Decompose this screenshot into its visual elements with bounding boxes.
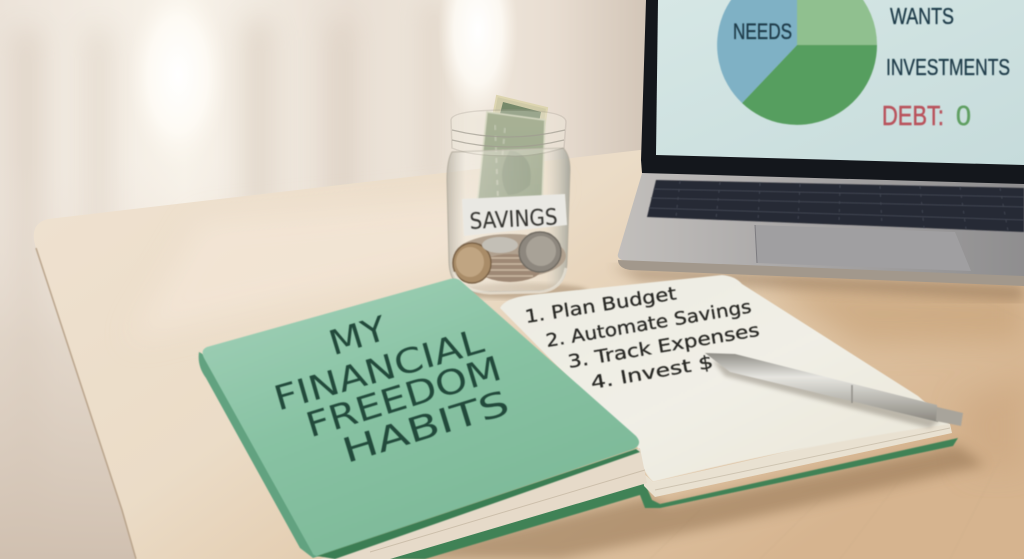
back cover green edge [378, 438, 958, 559]
cover title: HABITS [338, 383, 514, 472]
laptop lid bezel [641, 0, 1024, 184]
jar body [447, 148, 570, 292]
savings label [462, 194, 567, 236]
laptop front lip [618, 260, 1024, 286]
notebook shadow [380, 445, 985, 559]
keyboard [647, 180, 1024, 232]
right page [500, 275, 950, 482]
debt figure: DEBT: [882, 100, 944, 131]
pie chart [717, 0, 877, 125]
pen shadow [712, 360, 940, 428]
cover title: FINANCIAL [270, 321, 488, 419]
screen labels: NEEDS [733, 19, 792, 44]
front cover [203, 278, 639, 556]
coins [453, 232, 566, 283]
pen [705, 353, 963, 426]
book pages under front cover [320, 448, 647, 559]
laptop [612, 0, 1024, 300]
desk front edge shadow [36, 248, 136, 559]
light and shade on desk [130, 185, 1024, 470]
habit list [523, 283, 761, 394]
savings label text: SAVINGS [469, 205, 558, 235]
desk [34, 150, 1024, 559]
cover title: FREEDOM [301, 349, 506, 446]
habit list: 1. Plan Budget [523, 283, 678, 328]
habit list: 3. Track Expenses [566, 320, 761, 373]
trackpad [755, 225, 971, 271]
wood grain [650, 300, 1024, 559]
screen labels [733, 3, 1010, 80]
front cover spine side [199, 352, 319, 558]
laptop screen [656, 0, 1024, 165]
jar shadow [452, 283, 588, 299]
debt figure: 0 [956, 100, 971, 131]
habit list: 2. Automate Savings [544, 297, 753, 352]
cover bottom green edge [317, 449, 640, 559]
money bill back [492, 96, 547, 130]
habit list: 4. Invest $ [589, 352, 715, 394]
money bill front [477, 112, 545, 205]
savings jar [447, 96, 588, 299]
open notebook [199, 275, 985, 559]
cover title: MY [324, 309, 392, 364]
screen labels: WANTS [890, 3, 954, 29]
page block edge [640, 420, 952, 497]
jar base highlight [454, 268, 566, 293]
laptop shadow [612, 266, 1024, 300]
jar neck [451, 110, 566, 156]
cover title [270, 309, 514, 472]
laptop base [618, 170, 1024, 278]
